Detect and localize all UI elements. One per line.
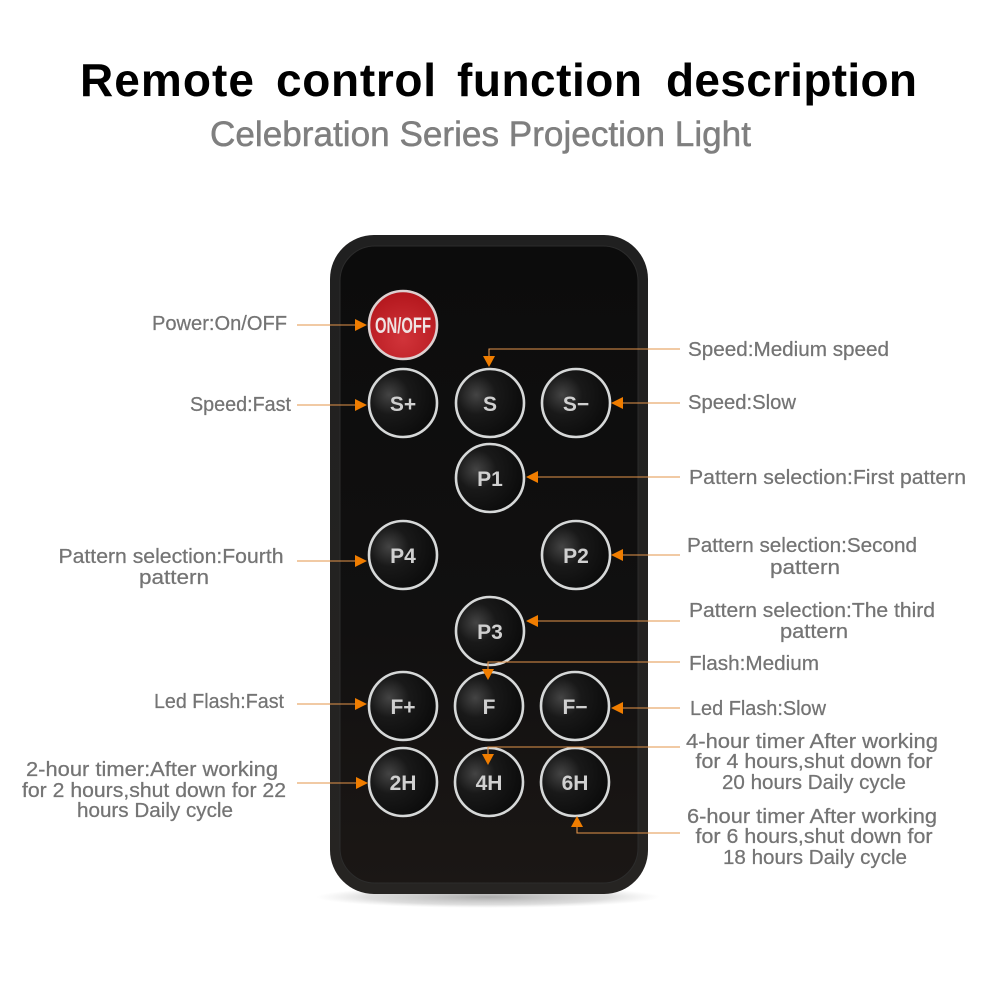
callout: 6-hour timer: 18 hours Daily cycle	[723, 847, 907, 869]
button: P2: P2	[563, 545, 589, 568]
callout: 4-hour timer: 4-hour timer After working	[686, 731, 938, 753]
callout: 6-hour timer	[571, 806, 937, 869]
remote body	[330, 235, 648, 894]
callout: 6-hour timer: for 6 hours,shut down for	[696, 826, 933, 848]
title	[80, 54, 917, 106]
remote shadow	[316, 886, 660, 908]
button: 6H: 6H	[562, 772, 588, 795]
callout: led flash slow	[611, 698, 827, 720]
button: P1	[456, 444, 524, 512]
callout: led flash fast: Led Flash:Fast	[154, 691, 284, 713]
button: F+	[369, 672, 437, 740]
button: S	[456, 369, 524, 437]
callout: 4-hour timer: for 4 hours,shut down for	[696, 751, 933, 773]
callout: third pattern: pattern	[780, 621, 848, 643]
callout: led flash fast	[154, 691, 367, 713]
callout: speed slow: Speed:Slow	[688, 392, 797, 414]
callout: speed medium: Speed:Medium speed	[688, 339, 889, 361]
subtitle: Celebration Series Projection Light	[210, 115, 751, 154]
button: ON/OFF: ON/OFF	[375, 313, 431, 338]
button: 2H: 2H	[390, 772, 416, 795]
callout: speed fast: Speed:Fast	[190, 394, 291, 416]
callout: 6-hour timer: 6-hour timer After working	[687, 806, 937, 828]
callout: fourth pattern: Pattern selection:Fourth	[58, 546, 284, 568]
button: F-	[541, 672, 609, 740]
remote control	[316, 235, 660, 908]
callout: fourth pattern: pattern	[139, 567, 209, 589]
callout: led flash slow: Led Flash:Slow	[690, 698, 827, 720]
callout: speed medium	[483, 339, 889, 367]
button: F+: F+	[390, 696, 416, 719]
callout: power	[152, 313, 367, 335]
callout: fourth pattern	[58, 546, 367, 589]
callout: 2-hour timer	[22, 759, 368, 822]
button: S+	[369, 369, 437, 437]
callout: second pattern	[611, 535, 917, 579]
callout: flash medium	[482, 653, 819, 680]
button: F: F	[483, 696, 496, 719]
title: function	[457, 54, 642, 106]
button: S-	[542, 369, 610, 437]
callout: speed fast	[190, 394, 367, 416]
button: S+: S+	[390, 393, 416, 416]
callout: first pattern	[526, 467, 966, 489]
callout: speed slow	[611, 392, 797, 414]
callout: flash medium: Flash:Medium	[689, 653, 819, 675]
title: description	[666, 54, 917, 106]
button: S-: S−	[563, 393, 589, 416]
callout: power: Power:On/OFF	[152, 313, 287, 335]
callout: 2-hour timer: for 2 hours,shut down for 22	[22, 780, 286, 802]
callout: third pattern	[526, 600, 935, 643]
button: F-: F−	[562, 696, 588, 719]
button: S: S	[483, 393, 497, 416]
callout: first pattern: Pattern selection:First pattern	[689, 467, 966, 489]
callout: second pattern: Pattern selection:Second	[687, 535, 917, 557]
callout: 4-hour timer: 20 hours Daily cycle	[722, 772, 906, 794]
button: 6H	[541, 748, 609, 816]
button: P1: P1	[477, 468, 503, 491]
callout: 4-hour timer	[482, 731, 938, 794]
callout: 2-hour timer: 2-hour timer:After working	[26, 759, 278, 781]
button: P3	[456, 597, 524, 665]
button: 4H	[455, 748, 523, 816]
button: P3: P3	[477, 621, 503, 644]
button: ON/OFF	[369, 291, 437, 359]
remote face	[340, 246, 638, 883]
button: P4	[369, 521, 437, 589]
callout: second pattern: pattern	[770, 557, 840, 579]
button: 4H: 4H	[476, 772, 502, 795]
button: F	[455, 672, 523, 740]
button: P4: P4	[390, 545, 416, 568]
title: Remote	[80, 54, 254, 106]
title: control	[276, 54, 436, 106]
button: P2	[542, 521, 610, 589]
button: 2H	[369, 748, 437, 816]
callout: 2-hour timer: hours Daily cycle	[77, 800, 233, 822]
callout: third pattern: Pattern selection:The third	[689, 600, 935, 622]
